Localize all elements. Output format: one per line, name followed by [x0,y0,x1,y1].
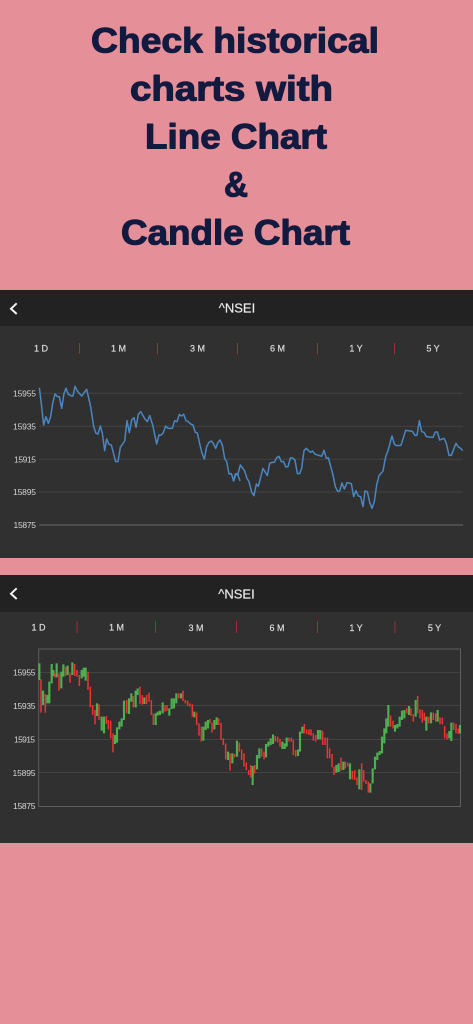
title: Candle Chart [121,214,350,253]
header bar: candle chart [0,575,473,612]
line chart: 15875 [14,520,36,530]
time range tabs: line chart: 5 Y [426,344,440,354]
time range tabs: candle chart [31,622,441,633]
time range tabs: candle chart: 1 Y [349,623,363,633]
candle chart [12,649,460,811]
time range tabs: candle chart: 6 M [269,623,285,633]
line chart: 15915 [14,454,36,464]
time range tabs: candle chart: 1 M [109,622,124,632]
line chart: 15955 [13,388,36,398]
time range tabs: candle chart: 3 M [188,623,204,633]
candle chart: 15915 [14,734,35,744]
time range tabs: candle chart: 1 D [31,622,46,632]
time range tabs: candle chart: 5 Y [428,623,441,633]
time range tabs: line chart: 1 M [111,344,126,354]
title: & [224,166,248,205]
candle chart: 15875 [13,801,36,811]
header bar: line chart [0,290,473,326]
time range tabs: line chart [34,343,440,354]
time range tabs: line chart: 6 M [270,344,285,354]
time range tabs: line chart: 1 D [34,344,48,354]
title [91,22,379,253]
panel: line chart screen [0,290,473,558]
line chart: 15895 [13,487,36,497]
candle chart: 15895 [12,768,36,778]
title: charts with [130,70,333,109]
line chart [13,386,463,530]
header bar: candle chart: ^NSEI [218,586,255,602]
time range tabs: line chart: 1 Y [349,344,363,354]
time range tabs: line chart: 3 M [190,344,205,354]
header bar: line chart: ^NSEI [219,300,255,316]
candle chart: 15955 [13,668,36,678]
title: Line Chart [145,118,327,157]
panel: candle chart screen [0,575,473,843]
candle chart: 15935 [13,701,36,711]
line chart: 15935 [13,421,36,431]
title: Check historical [91,22,379,61]
